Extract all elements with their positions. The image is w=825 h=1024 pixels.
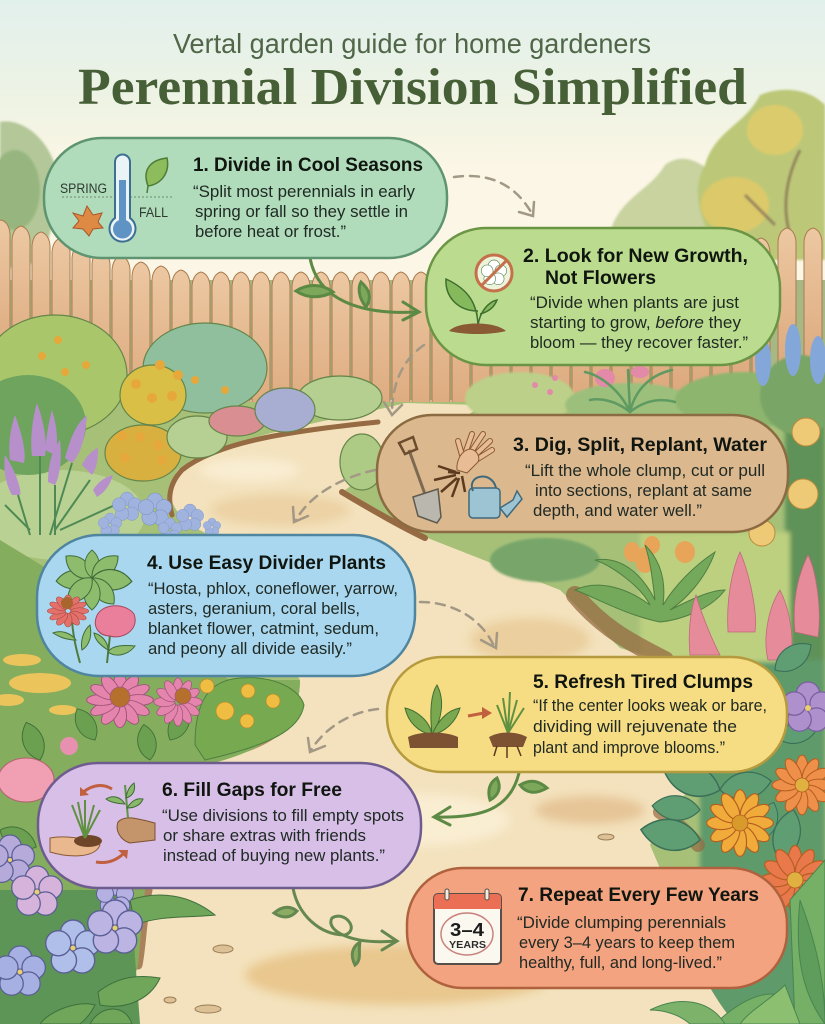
icon: calendar [434,889,501,964]
violets [0,835,142,995]
step 3 text: into sections, replant at same [535,482,752,500]
step 5 text: “If the center looks weak or bare, [533,697,767,715]
panel 2: new growth [426,228,780,365]
subtitle: Vertal garden guide for home gardeners [173,28,651,59]
soil edges [138,422,698,965]
far trees right [612,90,825,260]
step 7 text: “Divide clumping perennials [517,914,726,932]
step 4 text: and peony all divide easily.” [148,640,352,658]
step 7 text: every 3–4 years to keep them [519,934,735,952]
step 1 text: “Split most perennials in early [193,183,416,201]
step 6 text: or share extras with friends [163,827,366,845]
step 7 text: 7. Repeat Every Few Years [518,884,759,906]
arrow: step 1 to 2 dashed [454,176,534,216]
icon: thermometer with seasons [60,154,172,242]
left stems and leaves [0,704,196,856]
arrow: step 1 to 2 vine [296,258,419,320]
icon: shovel, hand and watering can [399,434,522,523]
icon: calendar: YEARS [449,940,486,951]
left lower garden [0,540,304,1024]
step 6 text [162,779,404,865]
green blades bottom right [715,860,825,1024]
arrow: step 5 to 6 vine [434,773,547,825]
pebbles [164,834,614,1013]
step 5 text: dividing will rejuvenate the [533,718,737,736]
shrub blooms [38,336,229,465]
ornamental grass clump [575,536,725,622]
step 4 text: blanket flower, catmint, sedum, [148,620,379,638]
blue flowers [98,492,221,541]
coneflowers [87,672,202,728]
left garden beds [0,315,384,560]
step 2 text [523,245,748,352]
yellow roses right [749,418,820,546]
step 4 text: “Hosta, phlox, coneflower, yarrow, [148,580,398,598]
step 4 text [147,552,398,658]
step 2 text: “Divide when plants are just [530,294,739,312]
arrow: step 4 to 5 dashed [420,602,497,648]
step 5 text: plant and improve blooms.” [533,739,725,757]
step 2 text: 2. Look for New Growth, [523,245,748,267]
step 5 text [533,671,767,757]
far trees left [0,121,57,270]
peony [0,758,54,802]
step 6 text: “Use divisions to fill empty spots [162,807,404,825]
icon: tired and refreshed clumps [405,685,527,758]
dark leaves right [638,636,825,863]
fence rails and pickets [0,220,825,448]
panel 7: repeat every few years [407,868,787,988]
pink lupins right [689,552,819,660]
small pink bloom [60,737,78,755]
icon: hands sharing plants [50,783,155,863]
panel 6: fill gaps [38,763,421,888]
step 5 text: 5. Refresh Tired Clumps [533,671,753,693]
ground [0,402,825,1024]
arrow: step 6 to 7 vine [274,888,397,965]
orange daisies right [707,755,825,914]
purple flower right [783,682,825,731]
panel 1: cool seasons [44,138,447,258]
right bed behind panel 2 [465,355,825,582]
step 1 text: 1. Divide in Cool Seasons [193,154,423,176]
step 4 text: asters, geranium, coral bells, [148,600,360,618]
panel 3: dig split replant [377,415,788,532]
step 4 text: 4. Use Easy Divider Plants [147,552,386,574]
step 7 text [517,884,759,972]
arrow: step 5 to 6 dashed [308,709,378,752]
arrow: step 2 to 3 dashed [384,345,424,415]
step 2 text: starting to grow, before they [530,314,742,332]
step 1 text: before heat or frost.” [195,223,346,241]
step 7 text: healthy, full, and long-lived.” [519,954,722,972]
heading block [78,28,747,116]
lavender stems [5,456,115,535]
grass behind panel 2 [585,370,675,412]
step 6 text: instead of buying new plants.” [163,847,385,865]
icon: thermometer with seasons: FALL [139,205,168,220]
panel 4: easy divider plants [37,535,415,676]
panel 5: refresh clumps [387,657,787,772]
step 3 text: “Lift the whole clump, cut or pull [525,462,765,480]
step 1 text: spring or fall so they settle in [195,203,408,221]
title: Perennial Division Simplified [78,59,747,116]
icon: thermometer with seasons: SPRING [60,181,107,196]
step 1 text [193,154,423,241]
step 3 text: depth, and water well.” [533,502,702,520]
step 6 text: 6. Fill Gaps for Free [162,779,342,801]
bottom-left leaves [40,976,160,1024]
step 3 text [513,434,767,520]
icon: seedling with no-flower sign [446,255,512,334]
yellow blooms [200,679,280,728]
bottom right leaf [650,1002,725,1024]
pink blooms behind panel 2 [532,366,649,395]
icon: calendar: 3–4 [450,920,484,940]
yarrow [0,654,77,715]
step 3 text: 3. Dig, Split, Replant, Water [513,434,767,456]
arrow: step 3 to 4 dashed [293,470,375,522]
step 2 text: Not Flowers [545,267,656,289]
blue spires right [755,324,825,386]
icon: hosta, coneflower and peony [47,550,135,663]
step 2 text: bloom — they recover faster.” [530,334,748,352]
lavender spikes left [4,403,113,497]
dirt path [122,403,735,1024]
